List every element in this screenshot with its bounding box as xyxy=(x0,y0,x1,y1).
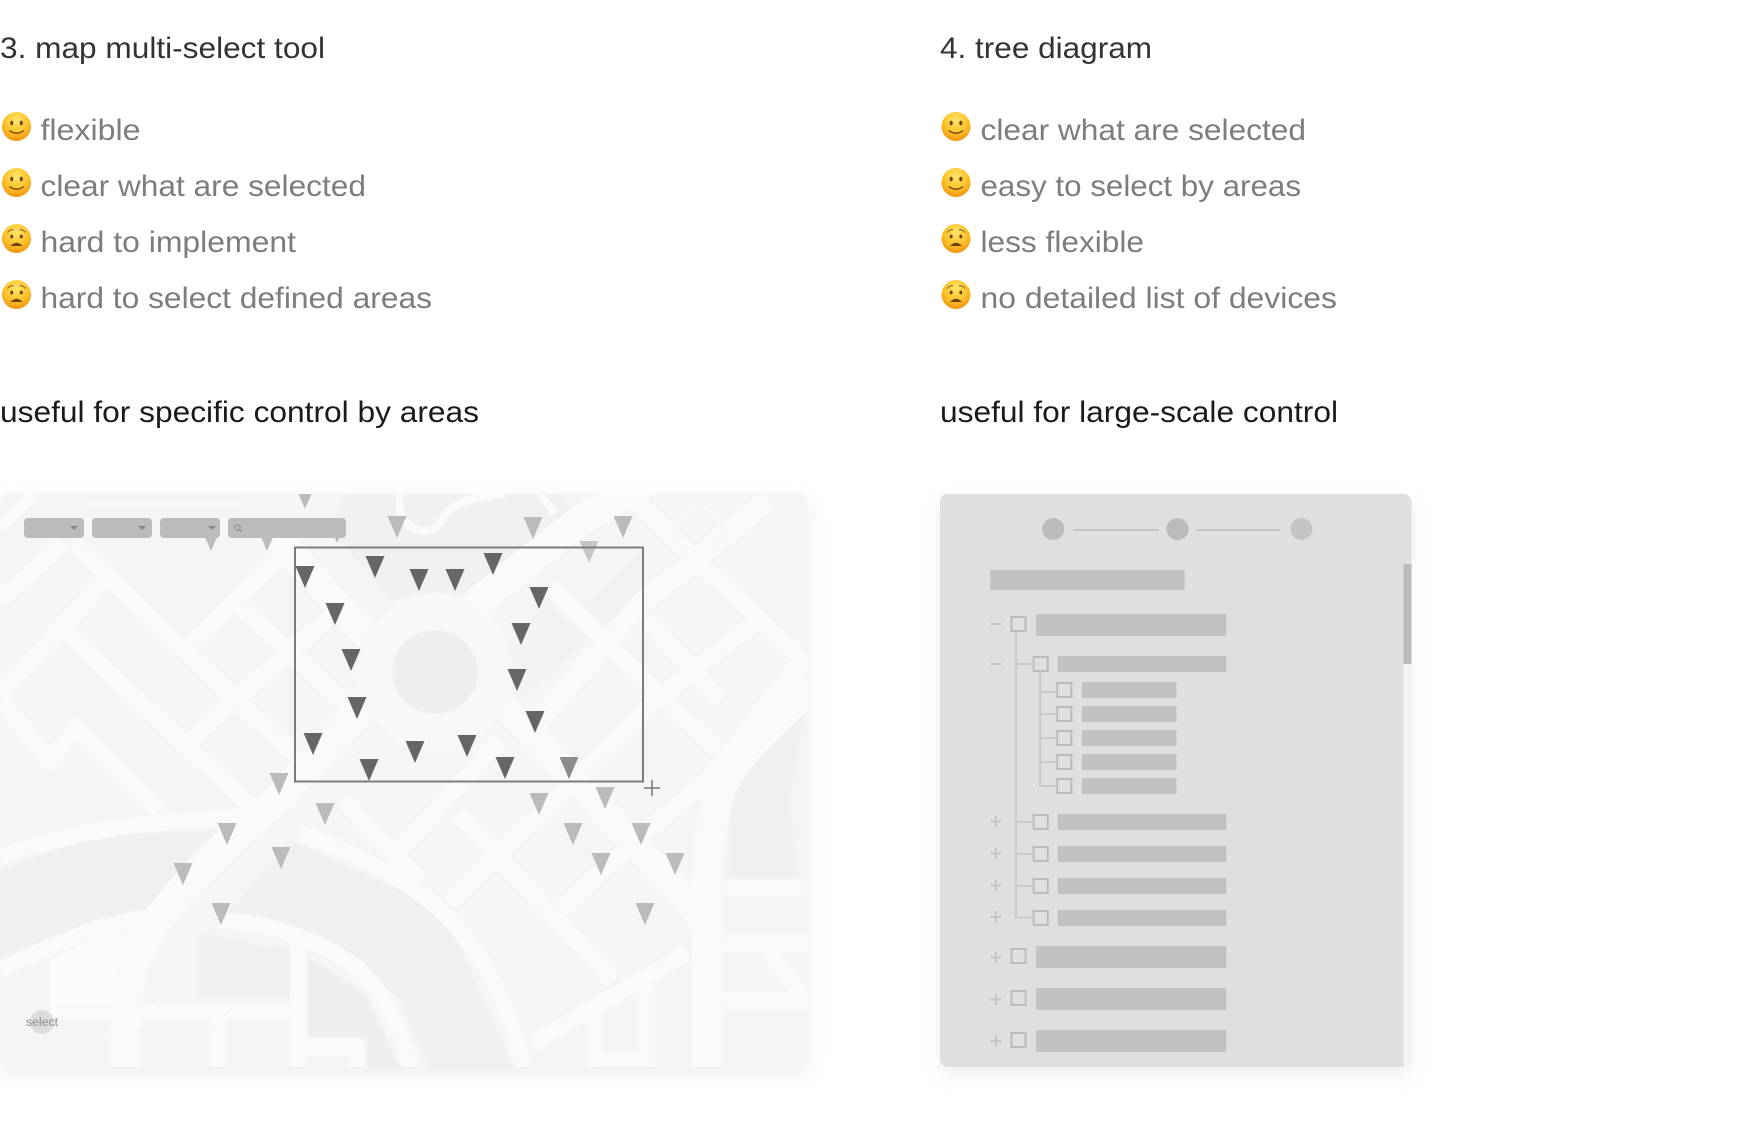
list: tree diagram pros and cons xyxy=(942,112,1337,315)
list: map tool pros and cons xyxy=(2,112,432,315)
scrollbar xyxy=(1404,564,1412,1067)
text: clear what are selected: clear what are selected xyxy=(40,170,366,203)
tree rows: collapsed top-level xyxy=(990,946,1226,1052)
tree row: expanded second-level xyxy=(990,656,1226,672)
stepper xyxy=(1042,518,1312,540)
unselected map markers xyxy=(174,487,684,925)
heading: tree diagram: 4. tree diagram xyxy=(940,32,1152,65)
crosshair cursor xyxy=(644,780,660,796)
filter bar xyxy=(24,518,346,538)
icon: sad xyxy=(942,224,970,253)
summary: map tool use case: useful for specific control by areas xyxy=(0,396,479,429)
icon: sad xyxy=(942,280,970,309)
icon: smile xyxy=(2,168,31,197)
tree connector lines xyxy=(1016,631,1057,918)
selection rectangle xyxy=(295,548,643,782)
selected map markers xyxy=(296,553,578,781)
text: clear what are selected: clear what are selected xyxy=(980,114,1306,147)
panel: tree diagram mockup xyxy=(940,494,1412,1067)
tree title bar xyxy=(990,570,1185,590)
select button: select xyxy=(26,1017,59,1029)
select button xyxy=(26,1010,59,1034)
tree rows: leaf items xyxy=(1057,682,1177,794)
map background xyxy=(0,480,812,1067)
icon: smile xyxy=(2,112,31,141)
text: no detailed list of devices: no detailed list of devices xyxy=(980,282,1337,315)
text: hard to implement: hard to implement xyxy=(40,226,297,259)
tree contents xyxy=(990,518,1312,1052)
icon: sad xyxy=(2,224,31,253)
text: less flexible: less flexible xyxy=(980,226,1144,259)
text: flexible: flexible xyxy=(40,114,140,147)
tree row: expanded top-level xyxy=(990,614,1226,636)
summary: tree diagram use case: useful for large-scale control xyxy=(940,396,1338,429)
icon: smile xyxy=(942,112,970,141)
panel: map selection mockup xyxy=(0,480,812,1067)
text: hard to select defined areas: hard to select defined areas xyxy=(40,282,432,315)
heading: map multi-select tool: 3. map multi-select tool xyxy=(0,32,325,65)
icon: smile xyxy=(942,168,970,197)
text: easy to select by areas: easy to select by areas xyxy=(980,170,1301,203)
icon: sad xyxy=(2,280,31,309)
tree rows: collapsed second-level xyxy=(990,814,1226,926)
